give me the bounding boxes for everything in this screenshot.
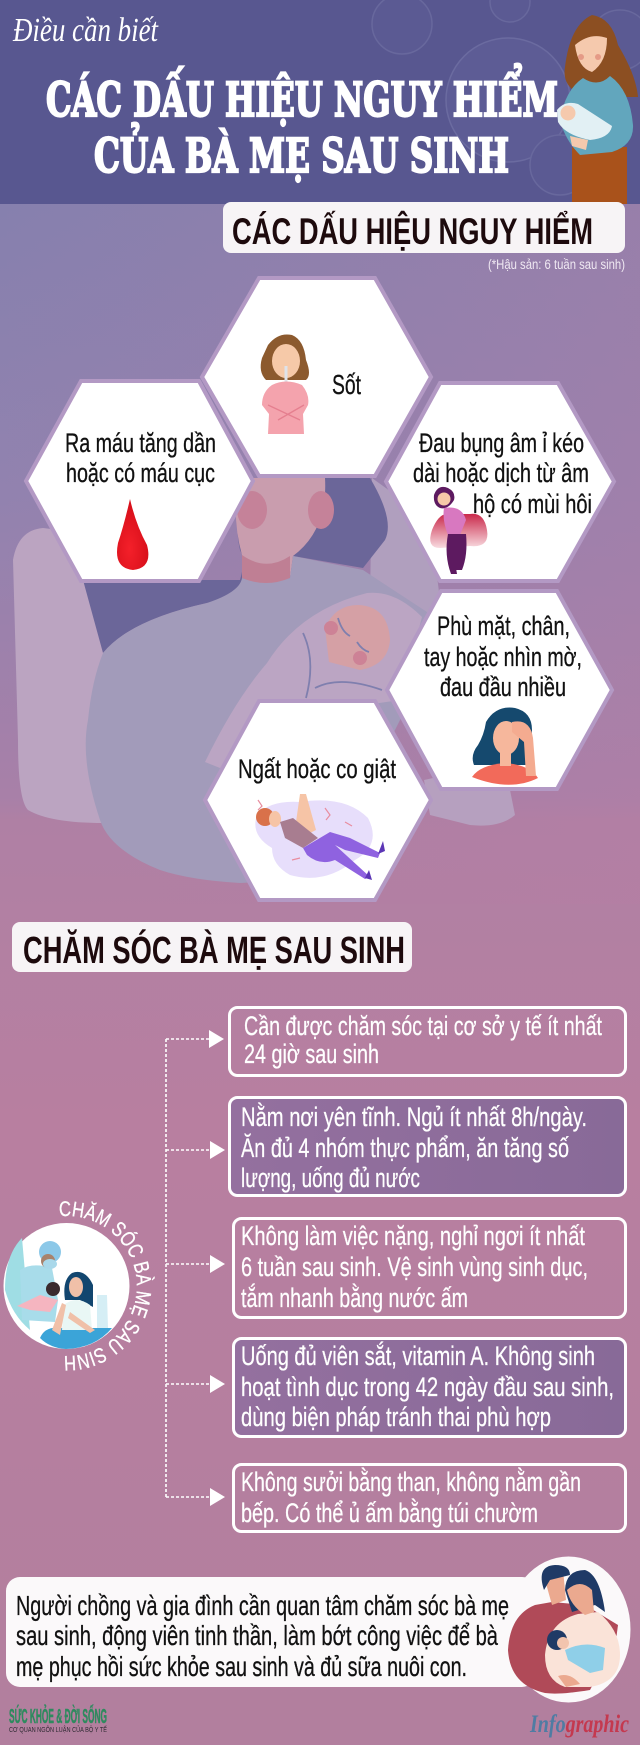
icon: woman with stomach pain xyxy=(430,487,487,574)
header band xyxy=(0,0,640,204)
box 2 xyxy=(230,1098,626,1196)
icon: blood drop xyxy=(117,499,148,570)
panel: phù mặt chân tay: tay hoặc nhìn mờ, xyxy=(424,642,582,672)
heading: chăm sóc bà mẹ sau sinh xyxy=(12,922,412,972)
callout: family support xyxy=(6,1556,630,1702)
callout: family support: mẹ phục hồi sức khỏe sau sinh và đủ sữa nuôi con. xyxy=(16,1651,467,1682)
panel: ngất co giật xyxy=(205,701,431,900)
box 1: 24 giờ sau sinh xyxy=(244,1039,379,1069)
panel: ngất co giật: Ngất hoặc co giật xyxy=(238,754,396,784)
icon: woman with thermometer xyxy=(261,334,309,434)
icon: couple with baby xyxy=(508,1565,620,1694)
connector arrows xyxy=(166,1030,225,1506)
panel: phù mặt chân tay: đau đầu nhiều xyxy=(440,672,566,702)
panel: sốt xyxy=(202,278,431,476)
curved label: CHĂM SÓC BÀ MẸ SAU SINH xyxy=(60,1201,155,1371)
panel: đau bụng xyxy=(386,383,614,581)
box 5 xyxy=(234,1464,626,1532)
panel: đau bụng: hộ có mùi hôi xyxy=(473,489,592,519)
kicker: Điều cần biết: Điều cần biết xyxy=(12,12,159,49)
background illustration: mother and baby xyxy=(13,478,515,883)
icon: mother holding newborn xyxy=(557,15,638,204)
logo: Sức khỏe & Đời sống: CƠ QUAN NGÔN LUẬN CỦA BỘ Y TẾ xyxy=(9,1724,107,1734)
logo: Sức khỏe & Đời sống xyxy=(9,1704,107,1734)
panel: phù mặt chân tay xyxy=(387,591,612,789)
panel: phù mặt chân tay: Phù mặt, chân, xyxy=(437,611,570,641)
box 4 xyxy=(234,1338,626,1436)
box 3: tắm nhanh bằng nước ấm xyxy=(241,1282,468,1313)
panel: đau bụng: Đau bụng âm ỉ kéo xyxy=(419,428,584,458)
box 5: bếp. Có thể ủ ấm bằng túi chườm xyxy=(241,1497,538,1528)
panel: ra máu: hoặc có máu cục xyxy=(66,458,215,488)
panel: ra máu xyxy=(26,381,253,581)
box 2: lượng, uống đủ nước xyxy=(241,1163,420,1193)
icon: woman with headache xyxy=(472,708,538,785)
title xyxy=(46,63,558,184)
icon: care circle illustration xyxy=(4,1223,130,1349)
panel: ra máu: Ra máu tăng dần xyxy=(65,428,216,458)
box 1 xyxy=(230,1008,626,1076)
panel: sốt: Sốt xyxy=(332,369,361,400)
infographic canvas: SỨC KHỎE & ĐỜI SỐNG xyxy=(9,1704,107,1728)
heading: chăm sóc bà mẹ sau sinh: CHĂM SÓC BÀ MẸ SAU SINH xyxy=(23,928,405,972)
icon: fainted person xyxy=(255,794,385,880)
box 3 xyxy=(234,1218,626,1318)
